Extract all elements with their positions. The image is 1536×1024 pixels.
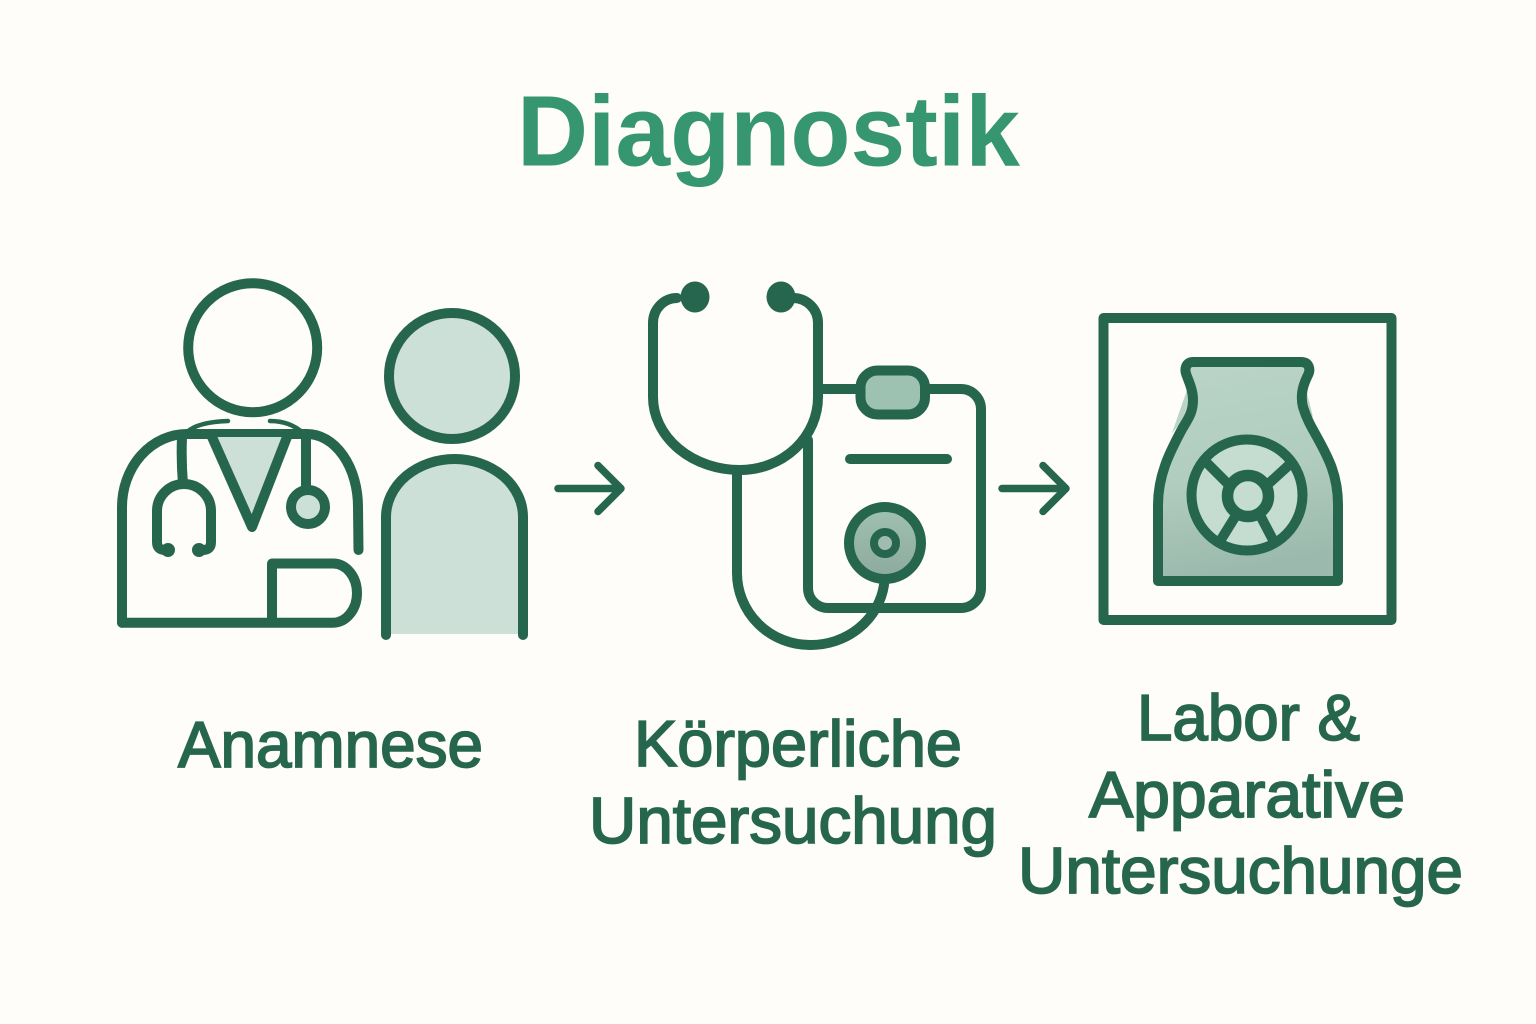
label: Labor & Apparative Untersuchunge <box>1018 681 1463 907</box>
label: Labor & Apparative Untersuchunge: Labor & <box>1137 681 1360 754</box>
clipboard clip <box>860 370 925 414</box>
label: Labor & Apparative Untersuchunge: Untersuchunge <box>1018 834 1463 907</box>
ear tips <box>680 282 710 312</box>
clipboard line <box>850 454 947 464</box>
label: Körperliche Untersuchung: Untersuchung <box>589 784 997 857</box>
arrow: step one to two <box>558 466 621 512</box>
icon: doctor and patient <box>122 283 523 635</box>
clipboard <box>808 389 981 608</box>
title: Diagnostik <box>517 76 1020 188</box>
arrow: step two to three <box>1002 466 1066 512</box>
chest piece <box>849 507 921 579</box>
label: Labor & Apparative Untersuchunge: Apparative <box>1089 758 1405 831</box>
frame <box>1104 318 1392 620</box>
organ outline <box>1158 362 1338 581</box>
icon: imaging frame with vase shape <box>1104 318 1392 620</box>
icon: stethoscope and clipboard <box>653 282 981 645</box>
label: Körperliche Untersuchung: Körperliche <box>634 707 962 780</box>
organ shading <box>1172 390 1313 433</box>
stethoscope tube <box>653 298 818 470</box>
label: Körperliche Untersuchung <box>589 707 997 857</box>
icon: patient <box>386 313 523 635</box>
radiation wheel <box>1192 440 1302 550</box>
label: Anamnese: Anamnese <box>178 708 483 781</box>
icon: doctor <box>122 283 358 623</box>
